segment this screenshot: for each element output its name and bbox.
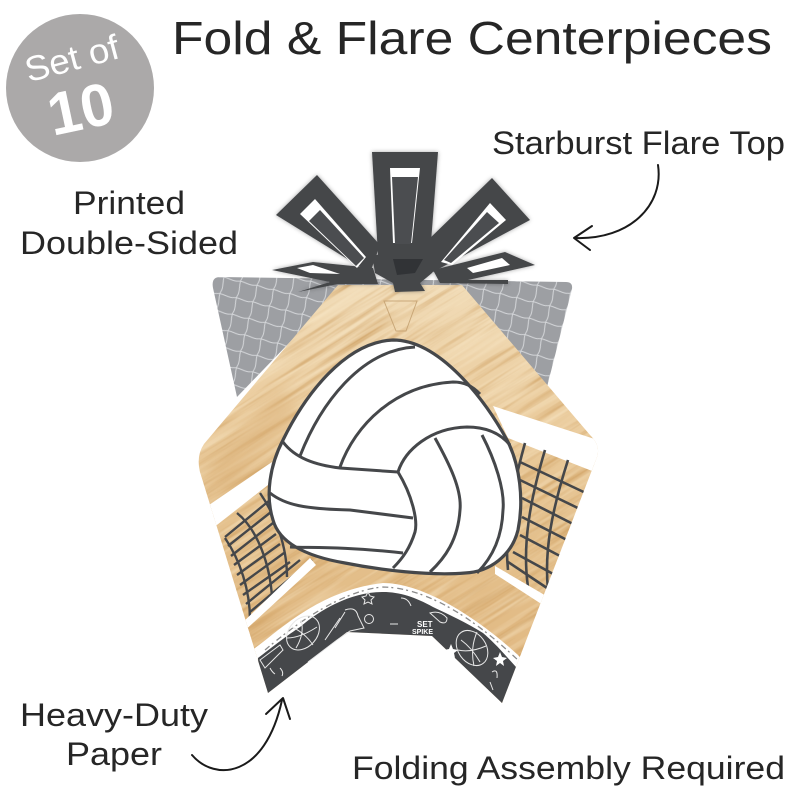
label: starburst flare top: Starburst Flare Top: [492, 125, 785, 161]
doodle: right volleyball: [450, 624, 494, 672]
white stripe: lower right: [495, 566, 544, 604]
chalkboard doodles: [260, 592, 497, 690]
center hub: [372, 252, 448, 292]
doodle: shoe and squiggles: [270, 598, 497, 690]
petal: far right wing: [433, 252, 535, 284]
doodle: player: [308, 609, 364, 662]
label: printed double-sided: Printed: [73, 185, 185, 221]
ball outline: [269, 340, 521, 574]
doodle text: set spike: SET: [417, 620, 433, 629]
fold shadow: left: [343, 285, 347, 590]
title: Fold & Flare Centerpieces: [172, 12, 772, 64]
label: printed double-sided: [20, 185, 238, 261]
dark chalkboard band: [258, 592, 520, 710]
doodle text: set spike: [412, 620, 433, 636]
arrow: to paper: [192, 698, 290, 770]
wood grain: [199, 285, 594, 660]
petal: right: [425, 178, 530, 272]
white scribble band: [240, 583, 535, 700]
label: heavy-duty paper: [20, 697, 208, 772]
back panel: gray net: [213, 277, 572, 397]
label: printed double-sided: Double-Sided: [20, 225, 238, 261]
doodle: left volleyball: [280, 610, 326, 656]
white stripe: upper right: [493, 406, 598, 471]
label: heavy-duty paper: Heavy-Duty: [20, 697, 208, 733]
petal: center: [372, 152, 438, 255]
slot outline: [384, 301, 417, 331]
net: right: [507, 443, 590, 590]
net: left: [225, 493, 312, 620]
badge: set of 10: [6, 14, 154, 162]
doodle text: set spike: SPIKE: [412, 629, 433, 636]
scribble doodles: [265, 587, 520, 662]
doodle: star and ball: [362, 592, 374, 604]
fold shadow: right: [448, 285, 452, 590]
ball seams: [270, 347, 510, 573]
doodle: chalk stars: [444, 644, 507, 666]
label: folding assembly: Folding Assembly Required: [352, 750, 785, 786]
label: heavy-duty paper: Paper: [66, 736, 162, 772]
petal: left: [276, 175, 380, 273]
darker wood patch: left: [207, 389, 299, 490]
volleyball: [269, 340, 521, 574]
wood background: [190, 280, 610, 710]
white stripe: upper left: [210, 462, 272, 526]
centerpiece card: [190, 280, 610, 710]
doodle: left shoe: [260, 645, 283, 668]
badge: set of 10: 10: [41, 69, 120, 149]
badge: set of 10: Set of: [21, 28, 124, 90]
arrow: to starburst: [574, 165, 659, 250]
petal: far left wing: [272, 262, 378, 292]
starburst cut-outs: [297, 168, 510, 275]
white stripe: lower left: [246, 558, 316, 628]
starburst flare top: [272, 152, 535, 292]
